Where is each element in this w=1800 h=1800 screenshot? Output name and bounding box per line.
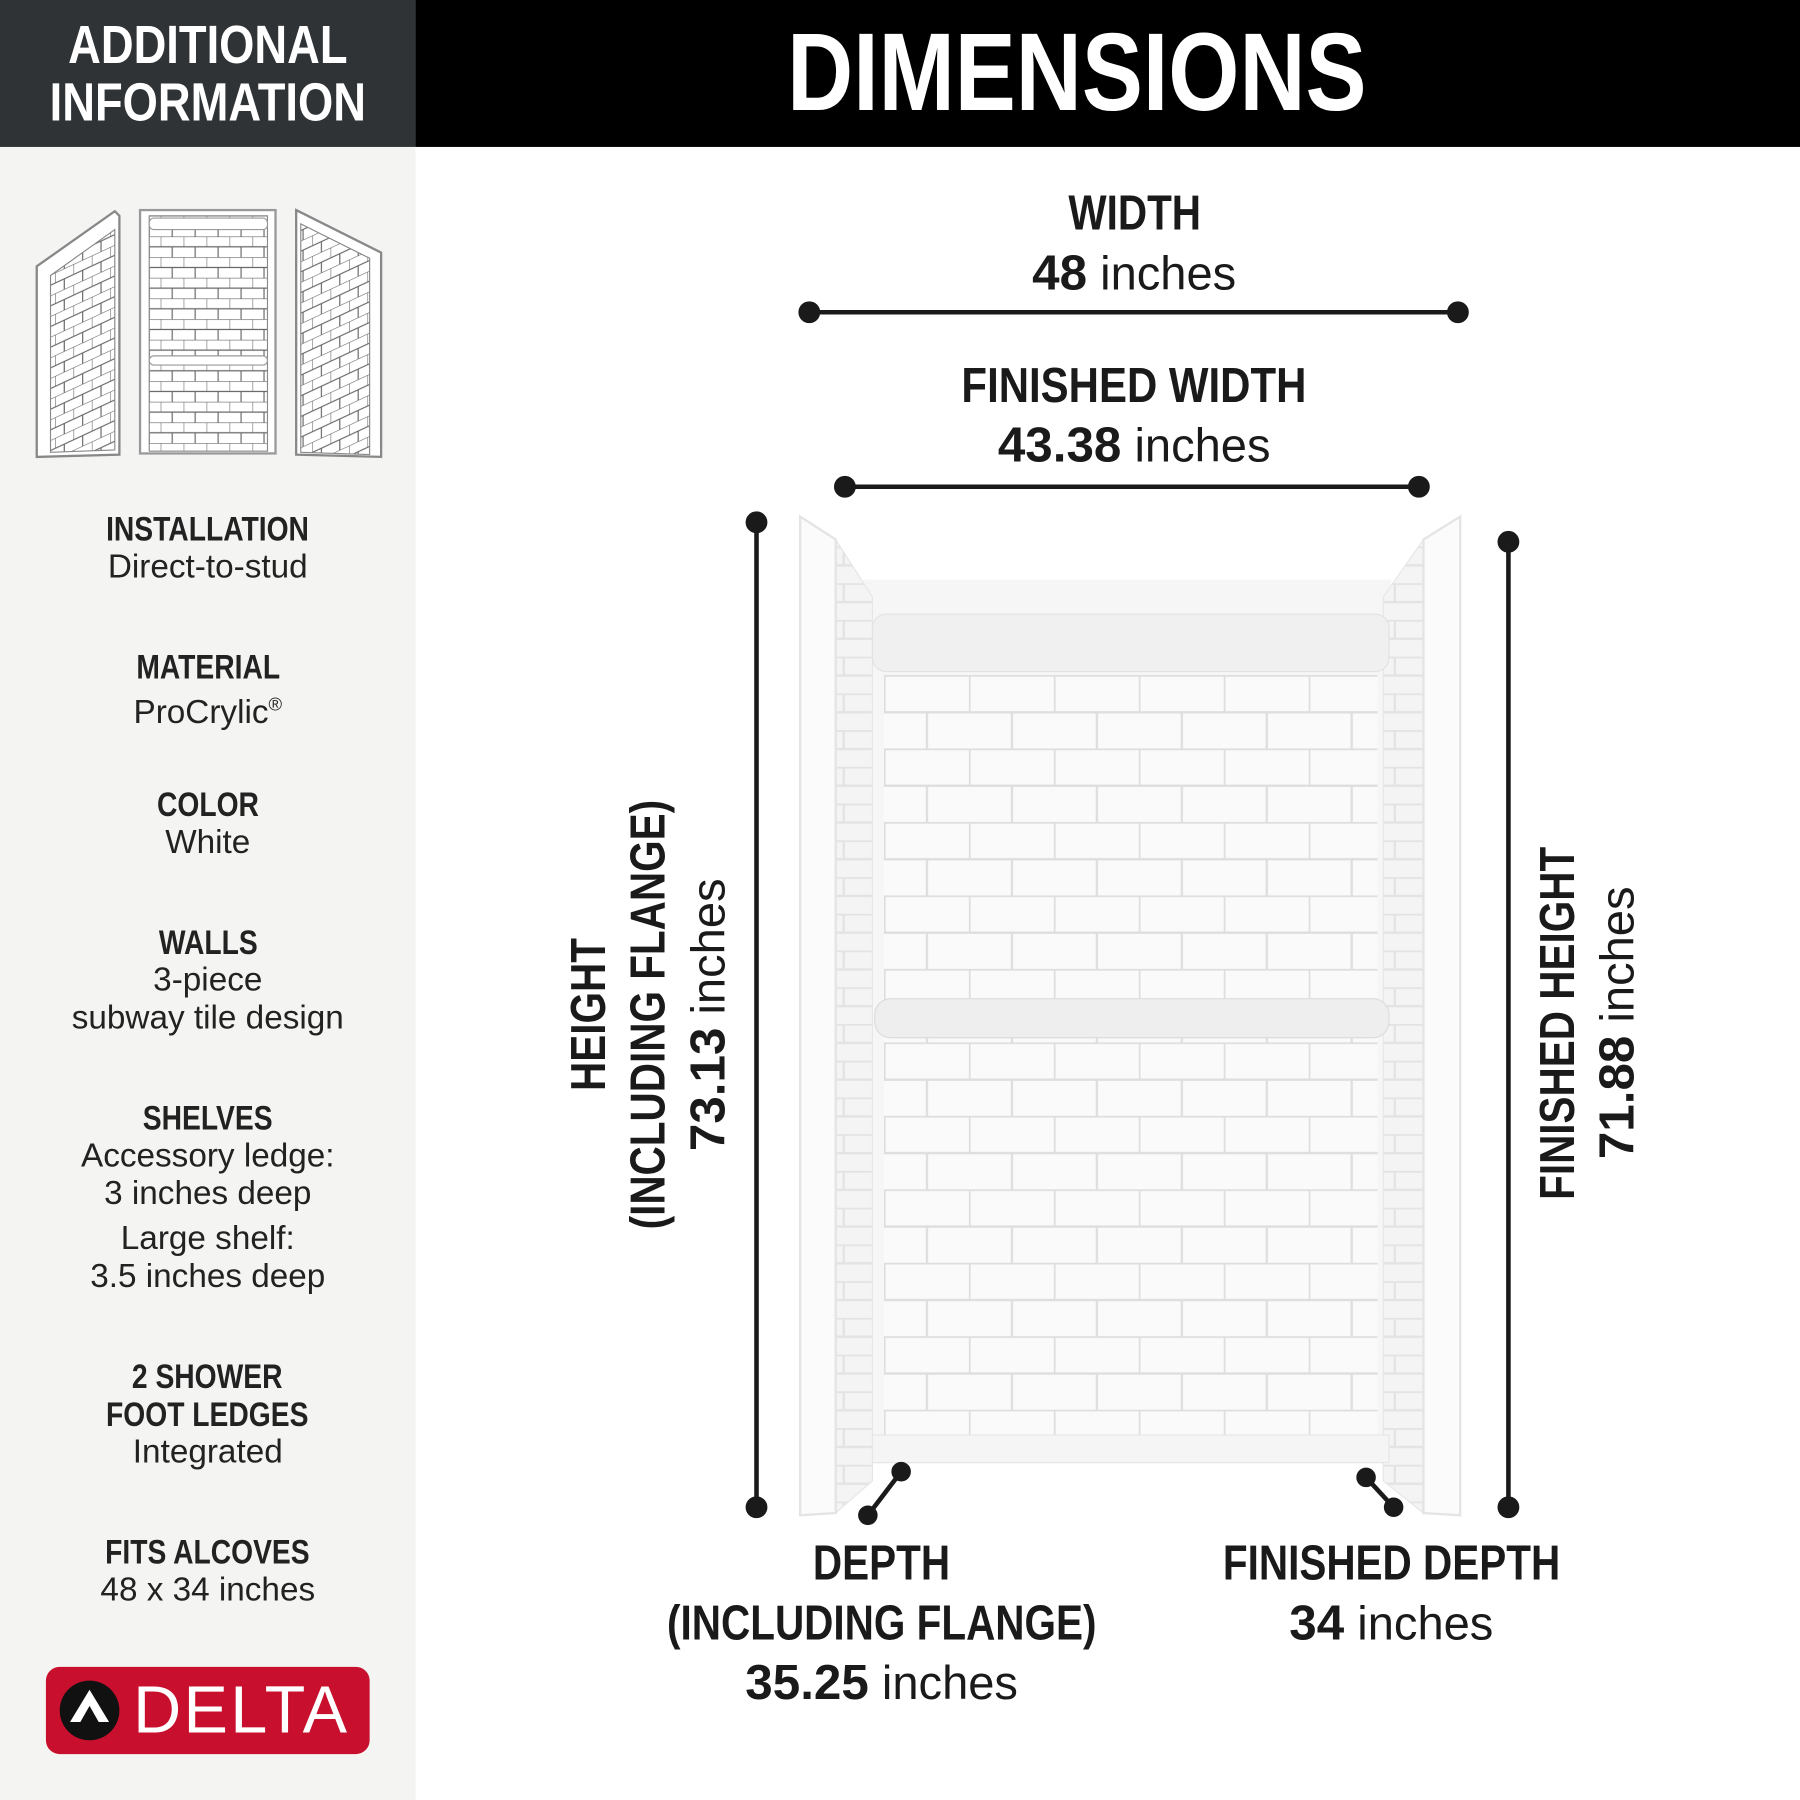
text: walls xyxy=(72,924,344,1037)
text: installation: Direct-to-stud xyxy=(108,549,308,585)
label: finished width: 43.38 inches xyxy=(998,418,1271,473)
text: color: COLOR xyxy=(157,786,259,824)
text: foot ledges: Integrated xyxy=(133,1434,283,1471)
label: finished depth: 34 inches xyxy=(1289,1596,1493,1651)
label: width: WIDTH xyxy=(1068,186,1201,241)
heading: additional information xyxy=(0,0,416,147)
text: color: White xyxy=(165,824,250,861)
panel: left sidebar xyxy=(0,0,416,1800)
dimension line: width xyxy=(799,302,1468,323)
dimension line: finished height xyxy=(1498,532,1519,1518)
label: finished depth xyxy=(1223,1536,1560,1651)
text: foot ledges: 2 SHOWER xyxy=(132,1358,283,1396)
logo: delta xyxy=(46,1667,370,1754)
label: depth: DEPTH xyxy=(813,1536,950,1591)
dimension line: finished width xyxy=(835,476,1429,497)
dimension line: finished depth xyxy=(1357,1468,1403,1516)
icon: three wall panels xyxy=(36,208,382,458)
text: foot ledges xyxy=(107,1358,309,1471)
label: finished height: FINISHED HEIGHT xyxy=(1530,846,1585,1199)
text: shelves: 3 inches deep Large shelf: xyxy=(104,1176,311,1257)
text: shelves xyxy=(81,1100,335,1295)
dimension line: depth xyxy=(859,1462,910,1524)
label: depth: 35.25 inches xyxy=(745,1655,1018,1710)
text: shelves: SHELVES xyxy=(143,1100,273,1138)
label: depth xyxy=(667,1536,1096,1710)
label: finished width: FINISHED WIDTH xyxy=(962,358,1307,413)
heading: additional information: ADDITIONAL xyxy=(68,14,348,75)
text: material: MATERIAL xyxy=(136,649,280,686)
label: width xyxy=(1032,186,1236,301)
shower unit xyxy=(800,517,1460,1515)
label: finished height: 71.88 inches xyxy=(1590,886,1645,1159)
text: walls: subway tile design xyxy=(72,1000,344,1037)
heading: dimensions: DIMENSIONS xyxy=(787,11,1366,134)
label: height including flange: HEIGHT xyxy=(561,938,616,1091)
text: color xyxy=(157,786,259,861)
logo: delta: DELTA xyxy=(133,1673,349,1747)
label: finished depth: FINISHED DEPTH xyxy=(1223,1536,1560,1591)
text: installation xyxy=(106,511,309,585)
heading: dimensions xyxy=(416,0,1800,147)
text: installation: INSTALLATION xyxy=(106,511,309,549)
label: finished height xyxy=(1530,846,1645,1199)
text: fits alcoves: FITS ALCOVES xyxy=(106,1534,310,1572)
text: fits alcoves: 48 x 34 inches xyxy=(100,1572,315,1608)
text: shelves: 3.5 inches deep xyxy=(90,1258,325,1295)
dimension line: height xyxy=(746,512,767,1518)
label: height including flange: (INCLUDING FLANGE) xyxy=(621,800,676,1230)
text: shelves: Accessory ledge: xyxy=(81,1138,335,1174)
label: depth: (INCLUDING FLANGE) xyxy=(667,1596,1096,1651)
text: fits alcoves xyxy=(100,1534,315,1608)
text: material xyxy=(133,649,282,731)
text: walls: 3-piece xyxy=(153,962,262,999)
heading: additional information: INFORMATION xyxy=(50,71,366,132)
text: walls: WALLS xyxy=(158,924,257,962)
text: material: ProCrylic® xyxy=(133,694,282,731)
label: width: 48 inches xyxy=(1032,246,1236,301)
label: finished width xyxy=(962,358,1307,473)
text: foot ledges: FOOT LEDGES xyxy=(107,1396,309,1434)
label: height including flange xyxy=(561,800,736,1230)
label: height including flange: 73.13 inches xyxy=(681,878,736,1151)
